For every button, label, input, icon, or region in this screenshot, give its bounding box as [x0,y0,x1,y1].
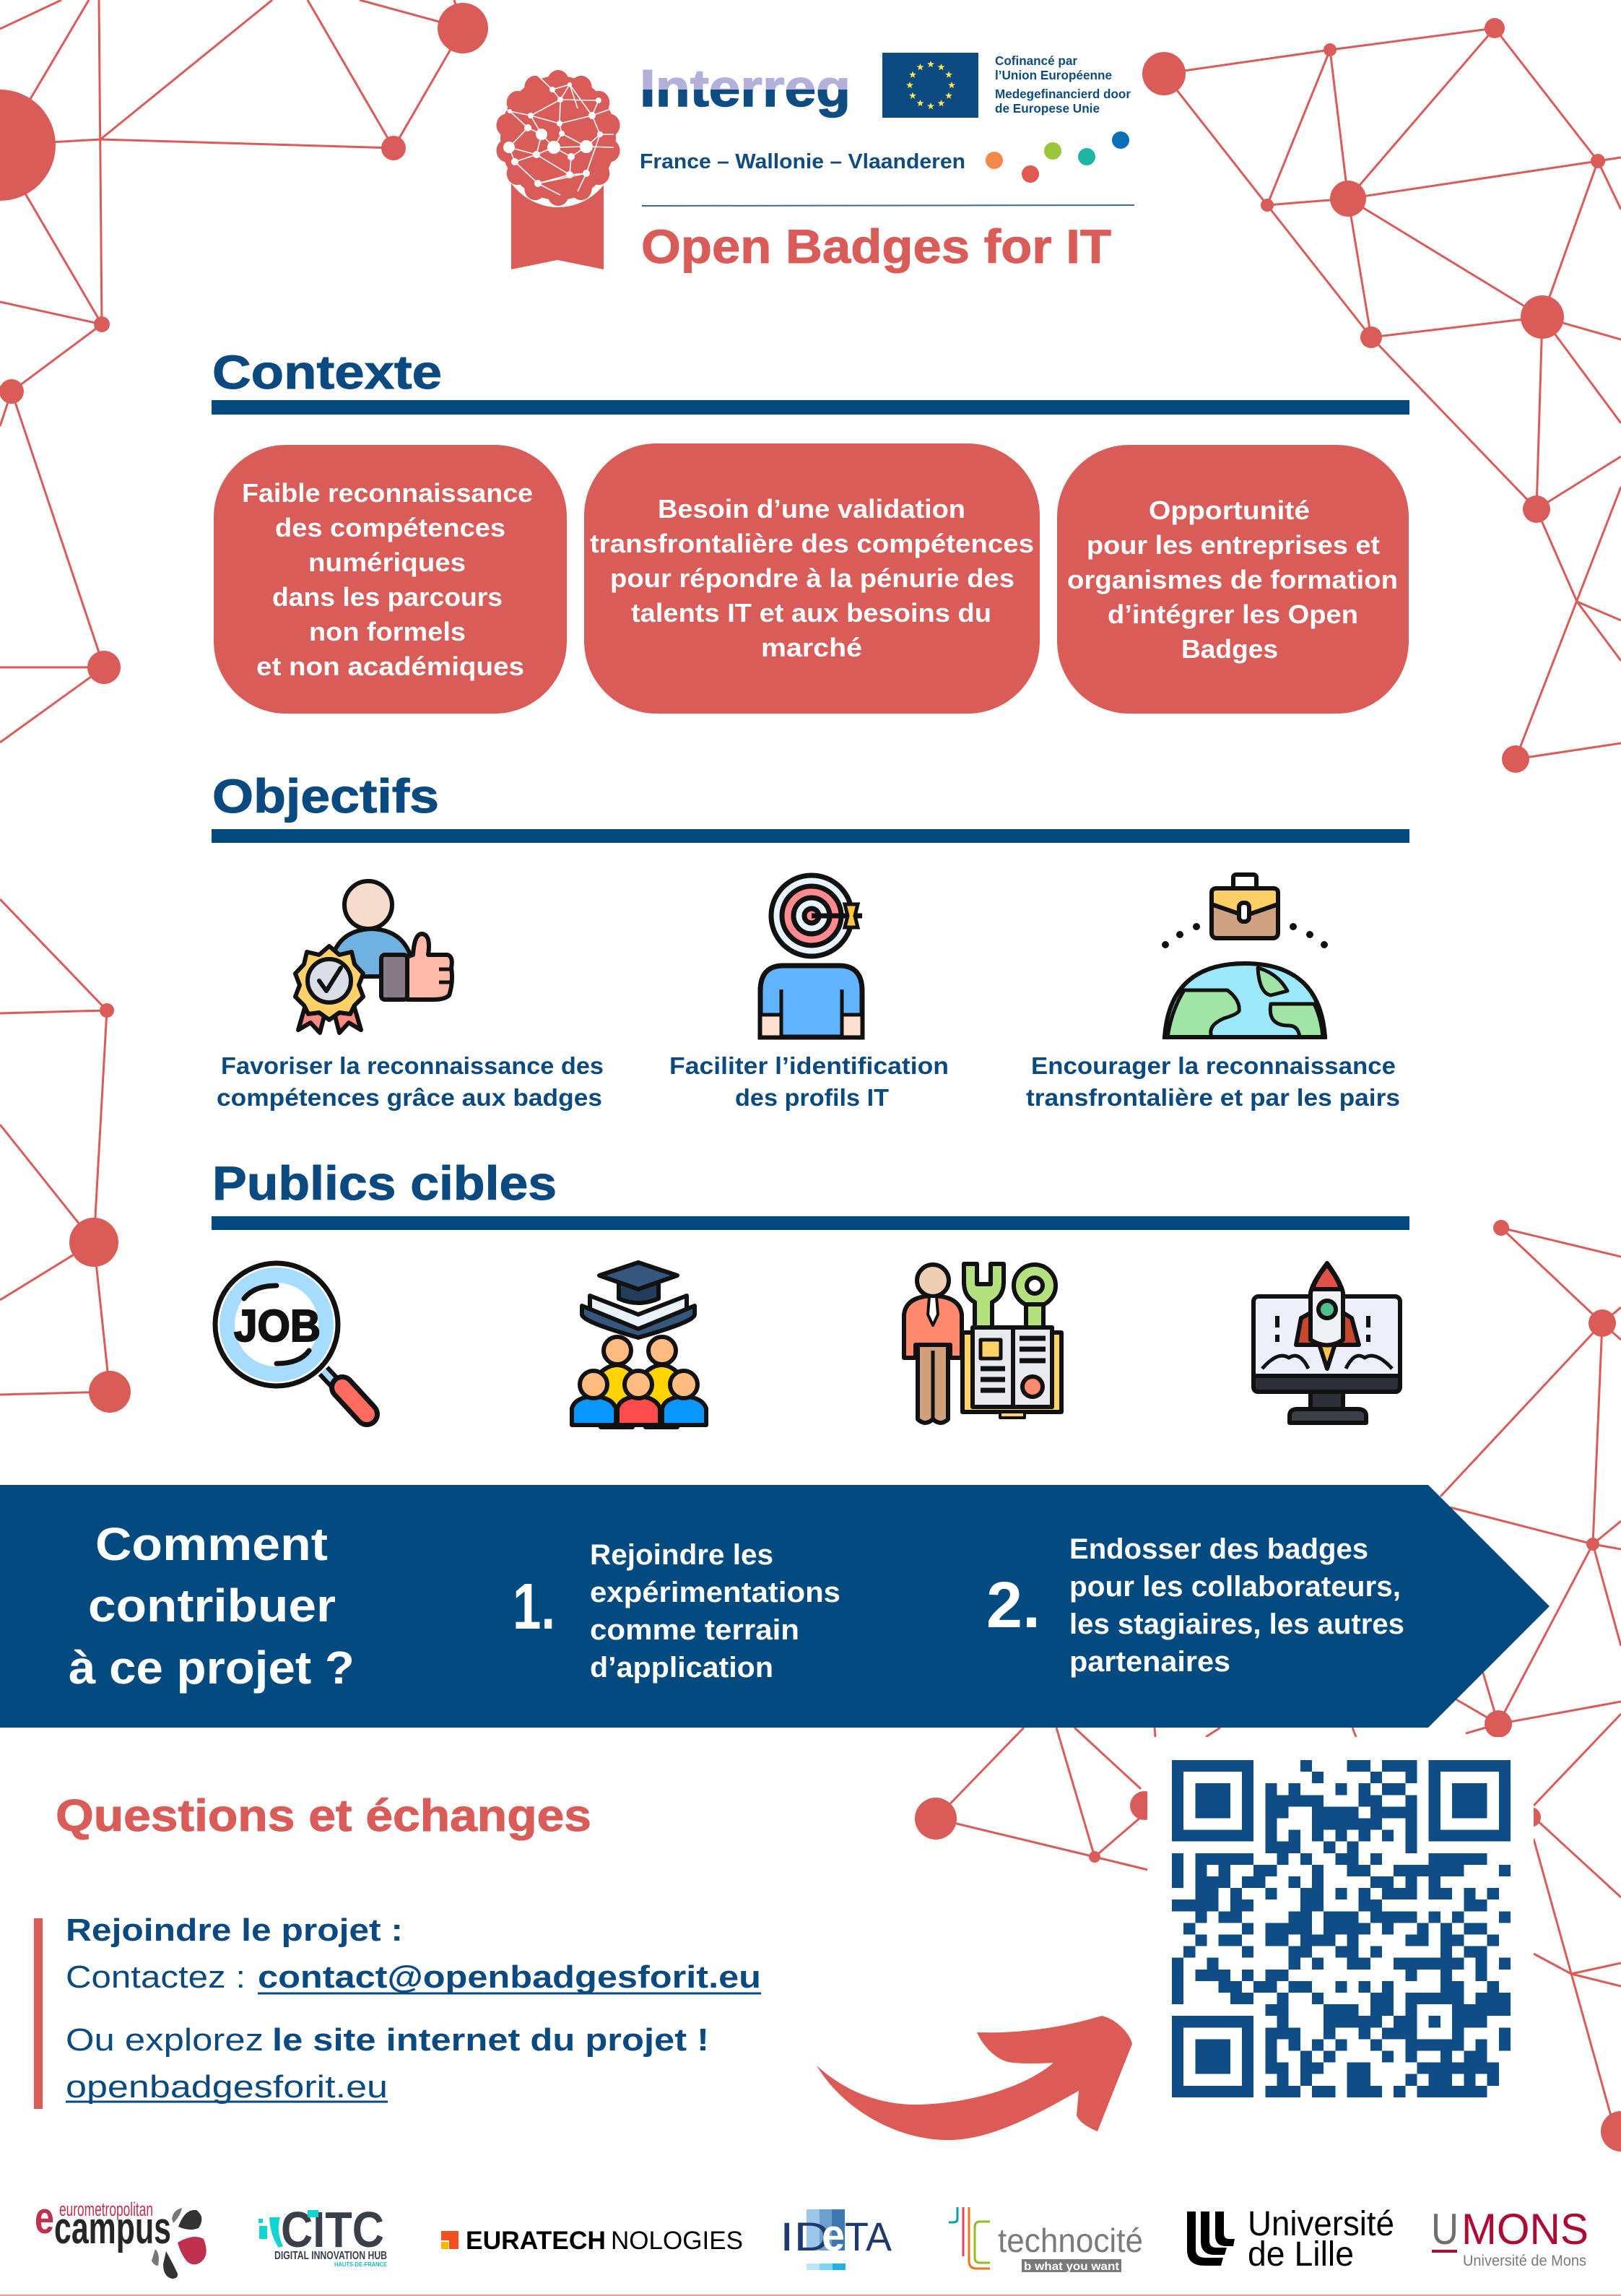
logo: Euratechnologies: EURATECH [466,2227,606,2255]
card: opportunite [1057,445,1409,714]
logo: CITC: CITC [281,2201,384,2258]
logo: CITC: DIGITAL INNOVATION HUB [274,2250,387,2262]
contact block: Rejoindre le projet : [66,1912,403,1948]
caption: identification: des profils IT [735,1084,889,1111]
icon: graduates with book [572,1262,706,1427]
step 1: expérimentations [590,1577,840,1608]
step 1: comme terrain [590,1614,799,1646]
step 1: Rejoindre les [590,1539,773,1571]
card: validation transfrontaliere [584,443,1040,714]
logo: eurometropolitan ecampus: eurometropolitan [59,2198,153,2220]
card: opportunite: Opportunité [1149,495,1310,525]
logo: eurometropolitan ecampus: e [35,2193,54,2243]
caption: transfrontaliere: Encourager la reconnaissance [1031,1052,1396,1079]
logo: UMONS: Université de Mons [1463,2253,1586,2269]
arrow [817,2016,1132,2140]
card: opportunite: d’intégrer les Open [1108,599,1358,629]
logo: Universite de Lille: de Lille [1248,2235,1354,2274]
caption: identification [669,1052,949,1111]
heading: Contexte: Contexte [212,345,442,399]
icon: target and person [760,875,862,1037]
logo: IDETA: TA [845,2214,892,2259]
logo: Interreg: France – Wallonie – Vlaanderen [640,150,965,173]
heading: questions et echanges: Questions et échanges [56,1791,591,1841]
card: faible reconnaissance: dans les parcours [272,582,503,612]
card: faible reconnaissance: et non académiques [256,651,524,681]
contact block: contact@openbadgesforit.eu [258,1959,761,1995]
icon: person with badge and thumb up [295,881,452,1033]
logo: CITC [258,2201,387,2268]
logo: Universite de Lille: Université [1248,2205,1394,2243]
caption: reconnaissance: Favoriser la reconnaissance des [221,1052,604,1079]
icon: job search magnifier: JOB [234,1301,321,1351]
heading: Publics cibles: Publics cibles [212,1156,557,1210]
step 1 [513,1539,840,1684]
logo: Universite de Lille [1187,2205,1394,2274]
contact block: le site internet du projet ! [272,2022,709,2058]
logo: Interreg [640,60,1129,183]
banner heading: Comment [95,1518,328,1570]
card: validation transfrontaliere: talents IT et aux besoins du [631,598,991,628]
contact block: Ou explorez [66,2022,264,2058]
contact block: openbadgesforit.eu [66,2069,388,2105]
caption: transfrontaliere [1026,1052,1400,1111]
logo: eurometropolitan ecampus: campus [54,2204,171,2253]
QR code [1147,1737,1534,2120]
card: validation transfrontaliere: transfrontalière des compétences [590,529,1034,558]
network: lower right [915,1220,1621,2152]
logo: Euratechnologies [441,2227,743,2255]
banner: comment contribuer [0,1485,1550,1728]
banner heading: contribuer [88,1580,336,1632]
text: EU co-funding: de Europese Unie [995,101,1100,116]
text: EU co-funding: Cofinancé par [995,53,1077,68]
logo: technocite: technocité [998,2222,1143,2259]
card: faible reconnaissance: non formels [309,617,466,646]
logo: EU flag [882,53,978,118]
logo: CITC: HAUTS-DE-FRANCE [334,2261,387,2268]
icon: rocket launch on monitor [1253,1263,1400,1423]
step 1: 1. [513,1571,555,1643]
logo: UMONS: MONS [1461,2205,1589,2253]
card: faible reconnaissance: numériques [308,547,466,577]
logo: Interreg: Interreg [640,60,851,118]
caption: reconnaissance: compétences grâce aux badges [217,1084,602,1111]
step 2: pour les collaborateurs, [1069,1571,1401,1603]
step 2 [986,1533,1404,1678]
heading: Publics cibles [212,1156,1409,1230]
card: opportunite: organismes de formation [1067,565,1398,594]
caption: transfrontaliere: transfrontalière et par les pairs [1026,1084,1400,1111]
logo: Open Badges seal [494,70,622,269]
text: EU co-funding: l’Union Européenne [995,68,1112,82]
logo: IDETA [780,2209,892,2270]
text: EU co-funding [995,53,1131,116]
network: top left [0,0,488,742]
logo: Euratechnologies: NOLOGIES [611,2227,743,2255]
contact block [34,1912,761,2109]
icon: professional with tools and book [904,1264,1061,1423]
card: validation transfrontaliere: marché [761,633,862,662]
contact block: Contactez : [66,1959,245,1995]
step 2: les stagiaires, les autres [1069,1608,1404,1640]
card: faible reconnaissance [214,445,567,714]
step 2: 2. [986,1569,1040,1642]
caption: reconnaissance [217,1052,604,1111]
title: Open Badges for IT [641,220,1111,273]
heading: Contexte [212,345,1409,415]
logo: technocite: b what you want [1024,2261,1120,2273]
card: validation transfrontaliere: pour répondre à la pénurie des [610,563,1014,593]
caption: identification: Faciliter l’identification [669,1052,949,1079]
step 2: partenaires [1069,1646,1230,1678]
card: opportunite: pour les entreprises et [1087,530,1380,560]
heading: Objectifs: Objectifs [212,769,439,823]
step 2: Endosser des badges [1069,1533,1368,1565]
card: faible reconnaissance: des compétences [275,513,505,542]
logo: UMONS [1431,2205,1589,2269]
logo: UMONS: U [1431,2205,1459,2253]
card: validation transfrontaliere: Besoin d’une validation [658,494,965,524]
logo: IDETA: e [822,2211,845,2261]
step 1: d’application [590,1652,773,1684]
network: top right [1142,18,1621,773]
logo: IDETA: ID [780,2214,830,2259]
banner heading: à ce projet ? [69,1642,355,1694]
card: faible reconnaissance: Faible reconnaissance [242,478,533,508]
logo: technocite [949,2207,1143,2273]
icon: job search magnifier [215,1263,367,1414]
heading: Objectifs [212,769,1409,843]
card: opportunite: Badges [1181,634,1278,664]
banner heading [69,1518,355,1694]
icon: briefcase over globe [1162,875,1328,1039]
logo: eurometropolitan ecampus [35,2193,207,2279]
text: EU co-funding: Medegefinancierd door [995,87,1131,101]
network: middle left [0,899,131,1413]
